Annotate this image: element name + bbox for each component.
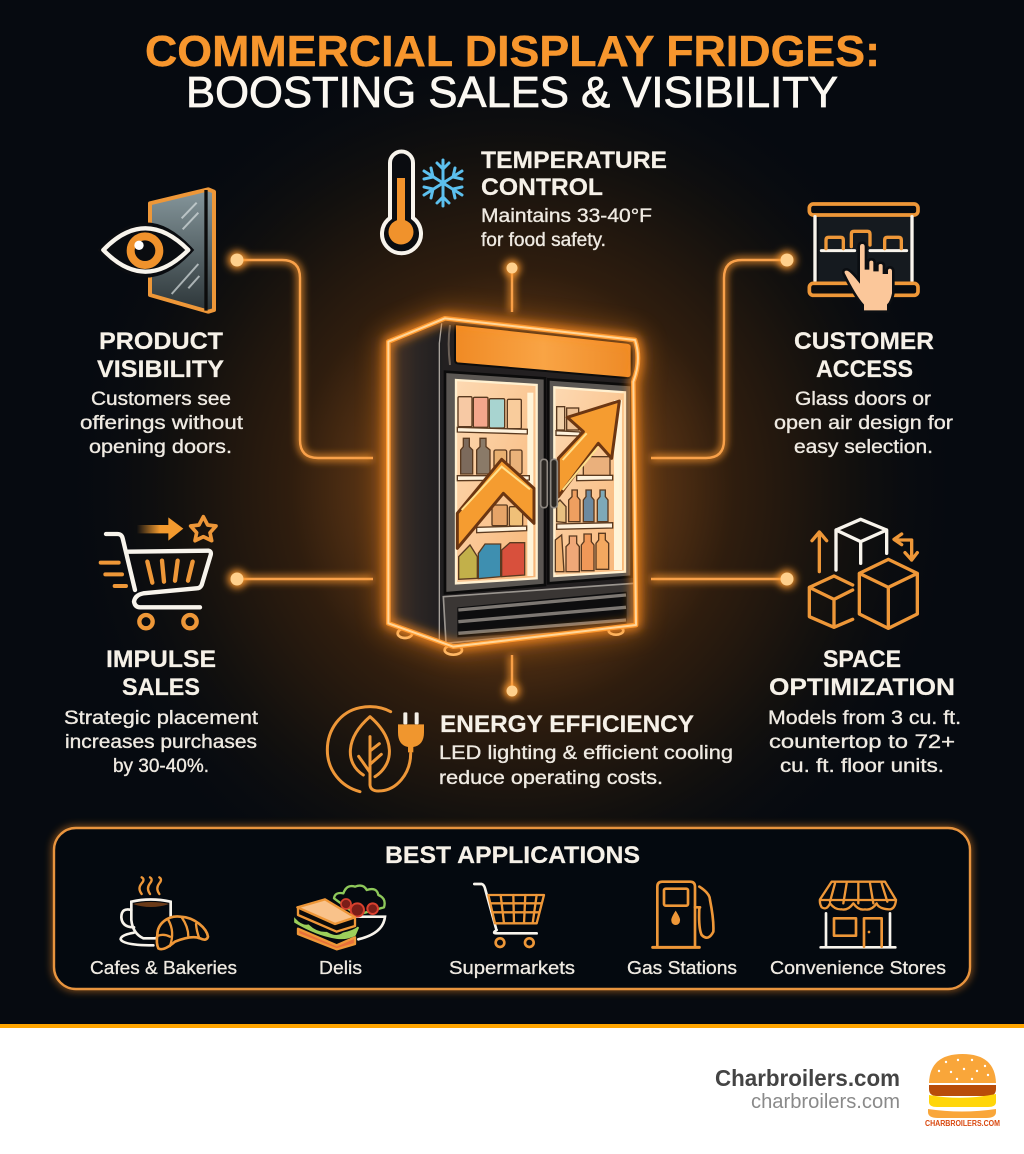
section: energy efficiency (327, 707, 733, 792)
title (145, 27, 880, 117)
heading: CUSTOMER (794, 328, 934, 355)
panel: best applications (54, 828, 970, 989)
neon outline (388, 318, 638, 647)
description: reduce operating costs. (439, 767, 663, 789)
icon: burger logo: CHARBROILERS.COM (925, 1119, 1000, 1128)
door handles (541, 459, 557, 508)
icon: burger logo (925, 1054, 1000, 1128)
heading: SPACE (823, 646, 901, 673)
description: by 30-40%. (113, 755, 209, 777)
bottom grille (443, 583, 635, 643)
description: Strategic placement (64, 707, 259, 729)
section: product visibility: VISIBILITY (97, 356, 224, 383)
description (80, 388, 244, 458)
application: supermarkets: Supermarkets (449, 957, 575, 978)
description: countertop to 72+ (769, 731, 955, 753)
connector lines (228, 251, 796, 699)
section: impulse sales (64, 517, 259, 777)
application: delis: Delis (319, 957, 362, 978)
description: cu. ft. floor units. (780, 755, 944, 777)
brand url: charbroilers.com (751, 1091, 900, 1113)
description: opening doors. (89, 436, 232, 458)
application: supermarkets (449, 884, 575, 978)
description: LED lighting & efficient cooling (439, 742, 733, 764)
title: COMMERCIAL DISPLAY FRIDGES: (145, 27, 880, 76)
header panel (455, 324, 632, 378)
description: Models from 3 cu. ft. (768, 707, 961, 729)
description: Glass doors or (795, 388, 932, 410)
heading: BEST APPLICATIONS (385, 842, 640, 869)
description: open air design for (774, 412, 954, 434)
fridge doors (445, 372, 632, 593)
description (481, 205, 652, 251)
heading: PRODUCT (99, 328, 223, 355)
heading: TEMPERATURE (481, 147, 667, 174)
heading: ENERGY EFFICIENCY (440, 711, 694, 738)
section: impulse sales: SALES (122, 674, 200, 701)
description: Maintains 33-40°F (481, 205, 652, 227)
section: customer access: ACCESS (816, 356, 913, 383)
fridge body (388, 318, 637, 655)
application: cafes and bakeries (90, 877, 237, 978)
application: gas stations: Gas Stations (627, 957, 737, 978)
description: easy selection. (794, 436, 933, 458)
description (774, 388, 954, 458)
title: BOOSTING SALES & VISIBILITY (186, 68, 838, 117)
description: offerings without (80, 412, 244, 434)
icon: leaf and plug (327, 707, 424, 792)
section: product visibility (80, 189, 244, 458)
section: space optimization: OPTIMIZATION (769, 674, 955, 701)
description (439, 742, 733, 789)
description: increases purchases (65, 731, 257, 753)
heading: IMPULSE (106, 646, 216, 673)
application: cafes and bakeries: Cafes & Bakeries (90, 957, 237, 978)
section: temperature control (382, 147, 667, 253)
section: customer access (774, 204, 954, 458)
description (768, 707, 961, 777)
brand name: Charbroilers.com (715, 1065, 900, 1091)
description (64, 707, 259, 777)
description: for food safety. (481, 229, 606, 251)
icon: shopping cart with star (101, 517, 216, 628)
icon: eye and glass door (103, 189, 214, 312)
application: convenience stores (770, 882, 946, 978)
shelves and products (457, 397, 613, 579)
application: gas stations (627, 882, 737, 978)
growth arrow (457, 401, 619, 548)
footer branding (715, 1054, 1000, 1128)
fridge illustration (383, 313, 641, 655)
application: delis (295, 886, 385, 978)
section: space optimization (768, 519, 961, 777)
section: temperature control: CONTROL (481, 174, 603, 201)
application: convenience stores: Convenience Stores (770, 957, 946, 978)
description: Customers see (91, 388, 231, 410)
icon: boxes with arrows (809, 519, 917, 628)
icon: display case and hand (809, 204, 918, 312)
icon: thermometer and snowflake (382, 152, 462, 253)
